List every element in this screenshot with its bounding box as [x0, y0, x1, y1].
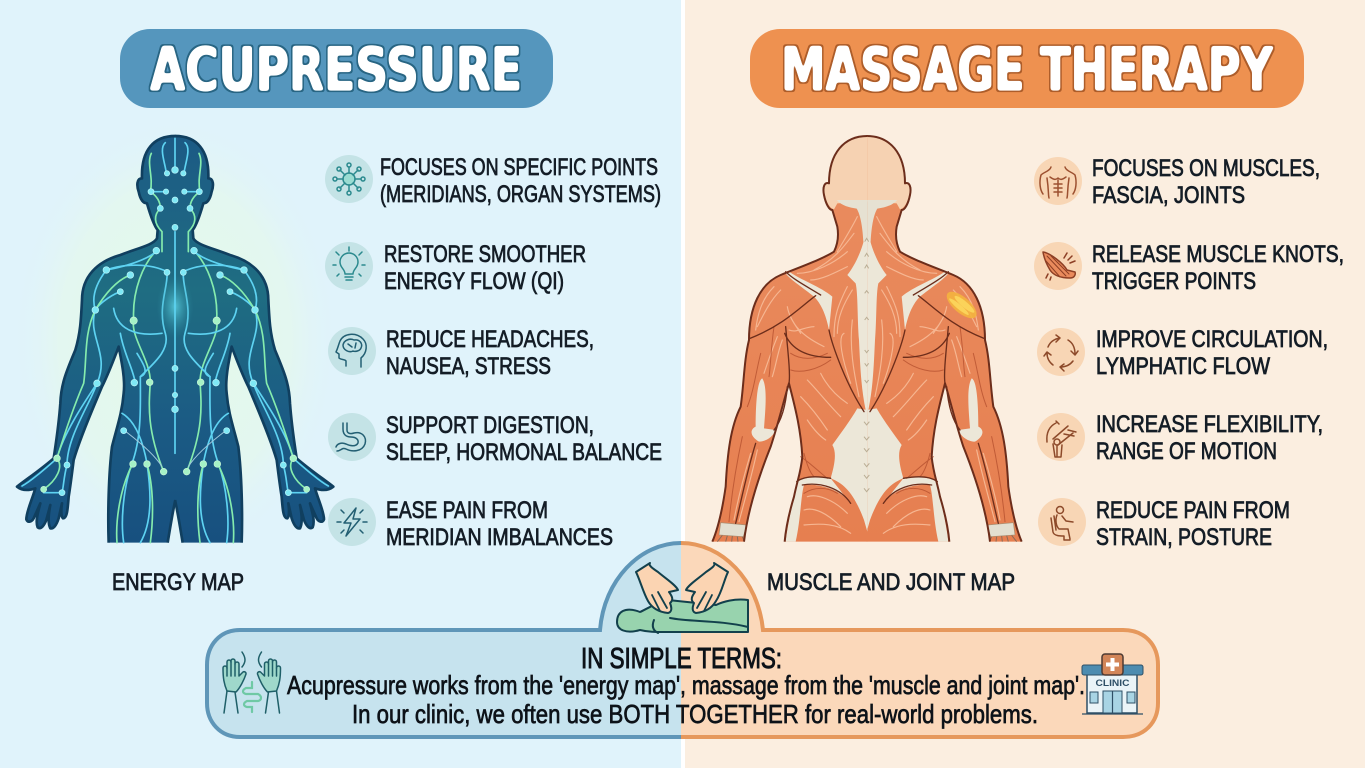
item: posture: REDUCE PAIN FROM — [1096, 497, 1290, 524]
item: muscle knots: TRIGGER POINTS — [1092, 268, 1256, 295]
item: specific points — [325, 154, 661, 208]
icon: hands and intestine — [223, 652, 280, 713]
item: circulation: LYMPHATIC FLOW — [1096, 353, 1270, 380]
item: pain relief: MERIDIAN IMBALANCES — [386, 524, 613, 551]
panel: in simple terms callout — [207, 543, 1158, 737]
list: acupressure benefits — [325, 154, 662, 551]
callout text line one: Acupressure works from the 'energy map', massage from the 'muscle and joint map'. — [287, 670, 1085, 700]
item: specific points: FOCUSES ON SPECIFIC POINTS — [380, 154, 658, 181]
icon: clinic building — [1082, 654, 1143, 714]
icon: clinic building: CLINIC — [1096, 678, 1130, 688]
item: energy flow: ENERGY FLOW (QI) — [384, 268, 564, 295]
panel: massage therapy background — [685, 0, 1365, 768]
caption: muscle and joint map: MUSCLE AND JOINT MAP — [767, 569, 1015, 596]
item: muscles and fascia: FASCIA, JOINTS — [1092, 182, 1245, 209]
item: muscle knots — [1034, 241, 1344, 295]
item: flexibility: INCREASE FLEXIBILITY, — [1096, 411, 1323, 438]
item: headaches — [328, 326, 594, 380]
callout text line two: In our clinic, we often use BOTH TOGETHER for real-world problems. — [352, 699, 1038, 729]
item: flexibility: RANGE OF MOTION — [1096, 438, 1277, 465]
icon: massage hands on body — [617, 563, 748, 633]
item: posture: STRAIN, POSTURE — [1096, 524, 1272, 551]
item: muscles and fascia — [1034, 155, 1320, 209]
caption: energy map: ENERGY MAP — [112, 569, 244, 596]
item: pain relief: EASE PAIN FROM — [386, 497, 548, 524]
item: headaches: REDUCE HEADACHES, — [386, 326, 594, 353]
heading: acupressure: ACUPRESSURE — [150, 35, 522, 105]
item: circulation — [1037, 326, 1328, 380]
highlight: shoulder trigger point — [942, 287, 981, 323]
callout heading: IN SIMPLE TERMS: — [581, 643, 782, 675]
figure: muscle and joint map back view — [712, 136, 1022, 542]
item: energy flow — [325, 241, 586, 295]
item: posture — [1038, 497, 1290, 551]
panel: acupressure background — [0, 0, 681, 768]
item: flexibility — [1037, 411, 1323, 465]
list: massage therapy benefits — [1034, 155, 1344, 551]
item: headaches: NAUSEA, STRESS — [386, 353, 551, 380]
item: digestion: SLEEP, HORMONAL BALANCE — [386, 439, 662, 466]
item: pain relief — [328, 497, 613, 551]
item: energy flow: RESTORE SMOOTHER — [384, 241, 586, 268]
figure: energy map body with meridians — [10, 115, 340, 565]
item: specific points: (MERIDIANS, ORGAN SYSTEMS) — [380, 181, 661, 208]
item: digestion: SUPPORT DIGESTION, — [386, 412, 594, 439]
item: digestion — [328, 412, 662, 466]
